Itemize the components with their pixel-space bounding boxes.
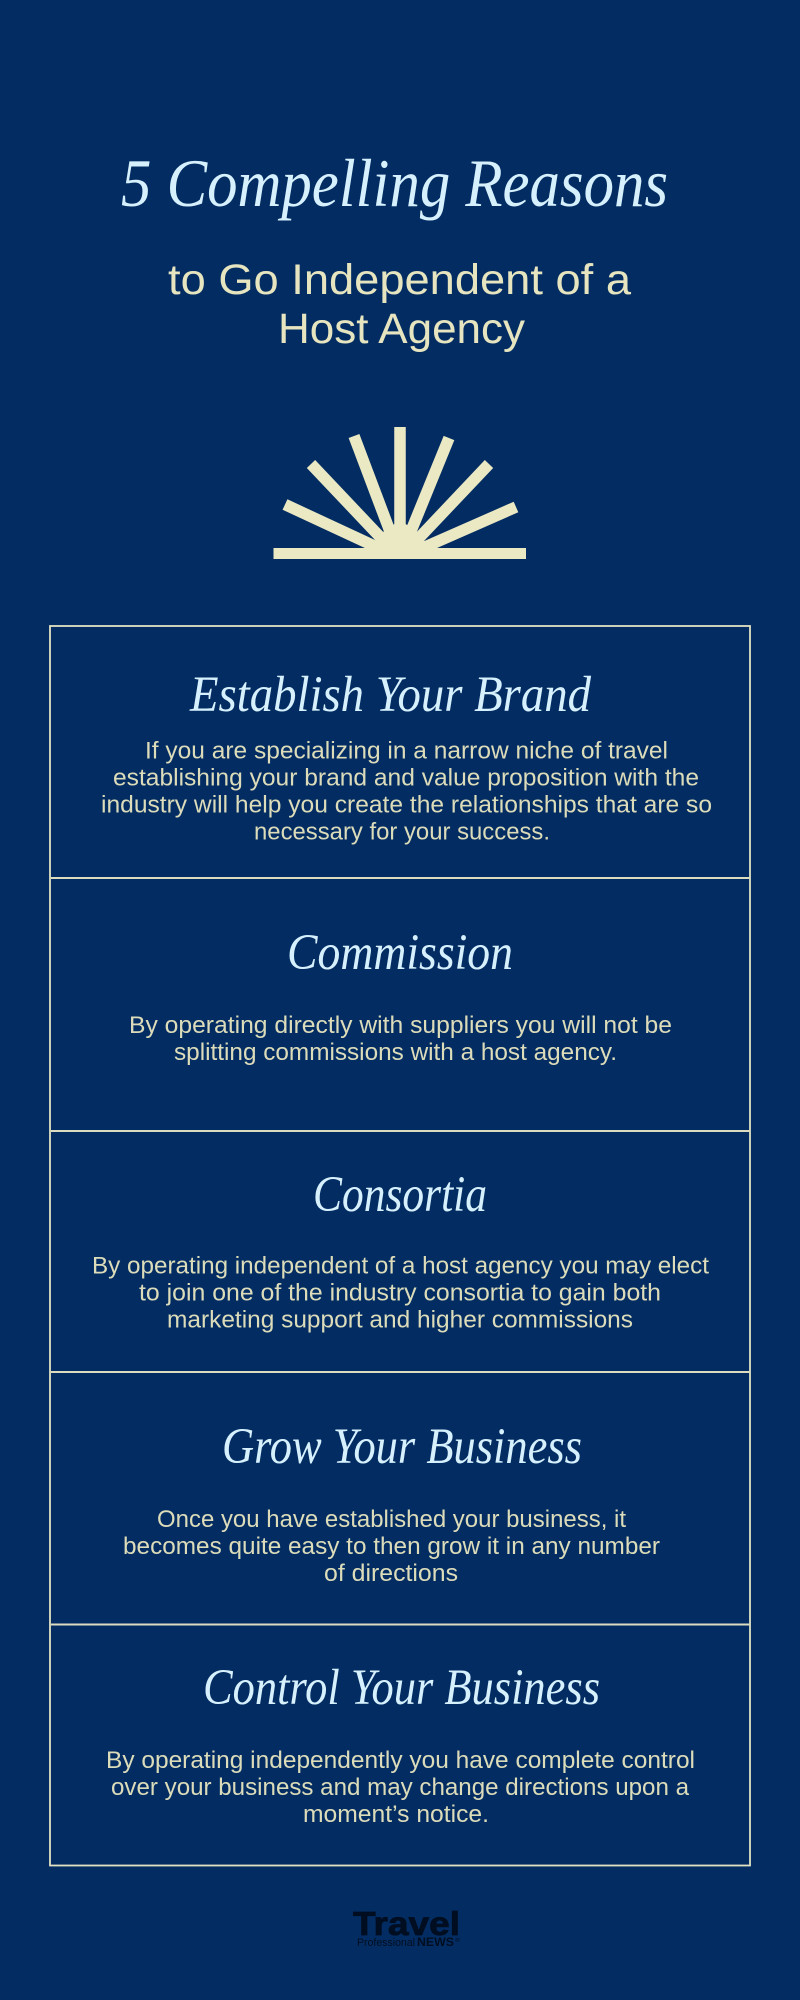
row divider 4 [51,1624,750,1626]
text: establish your brand: If you are specializing in a narrow niche of travel [145,738,668,764]
title: 5 Compelling Reasons [121,145,668,221]
text: commission: splitting commissions with a host agency. [174,1039,617,1066]
heading: establish your brand: Establish Your Brand [189,667,591,723]
panel: commission [129,925,672,1066]
text: establish your brand: necessary for your success. [254,818,550,846]
logo: Travel Professional News: Travel [353,1905,460,1942]
row divider 3 [51,1371,750,1373]
panel: reasons frame [50,626,750,1866]
heading: grow your business: Grow Your Business [222,1419,582,1475]
panel: control your business [106,1660,695,1828]
text: commission: By operating directly with suppliers you will not be [129,1012,672,1039]
heading: control your business: Control Your Business [203,1660,600,1716]
logo: Travel Professional News: NEWS [417,1937,454,1949]
text: establish your brand [101,738,712,846]
text: control your business: By operating independently you have complete control [106,1747,695,1774]
text: control your business [106,1747,695,1828]
subtitle [168,256,631,353]
heading: commission: Commission [287,925,513,981]
text: establish your brand: industry will help you create the relationships that are so [101,792,712,818]
icon: sunburst [274,427,526,559]
text: consortia: to join one of the industry consortia to gain both [139,1280,661,1306]
text: grow your business [123,1506,660,1587]
panel: establish your brand [101,667,712,846]
row divider 1 [51,877,750,879]
text: control your business: moment’s notice. [303,1801,489,1828]
subtitle: Host Agency [278,305,526,353]
panel frame outline [50,626,750,1866]
text: grow your business: of directions [324,1560,458,1587]
text: consortia [92,1252,709,1334]
text: consortia: By operating independent of a host agency you may elect [92,1252,709,1280]
text: control your business: over your business and may change directions upon a [111,1774,690,1801]
text: commission [129,1012,672,1066]
text: consortia: marketing support and higher commissions [167,1306,633,1334]
text: establish your brand: establishing your brand and value proposition with the [113,764,699,792]
panel: grow your business [123,1419,660,1587]
logo: Travel Professional News: Professional [357,1937,415,1949]
subtitle: to Go Independent of a [168,256,631,304]
row divider 2 [51,1130,750,1132]
logo: Travel Professional News: ® [455,1937,460,1944]
text: grow your business: Once you have established your business, it [157,1506,626,1533]
text: grow your business: becomes quite easy to then grow it in any number [123,1533,660,1560]
heading: consortia: Consortia [313,1167,487,1223]
panel: consortia [92,1167,709,1334]
